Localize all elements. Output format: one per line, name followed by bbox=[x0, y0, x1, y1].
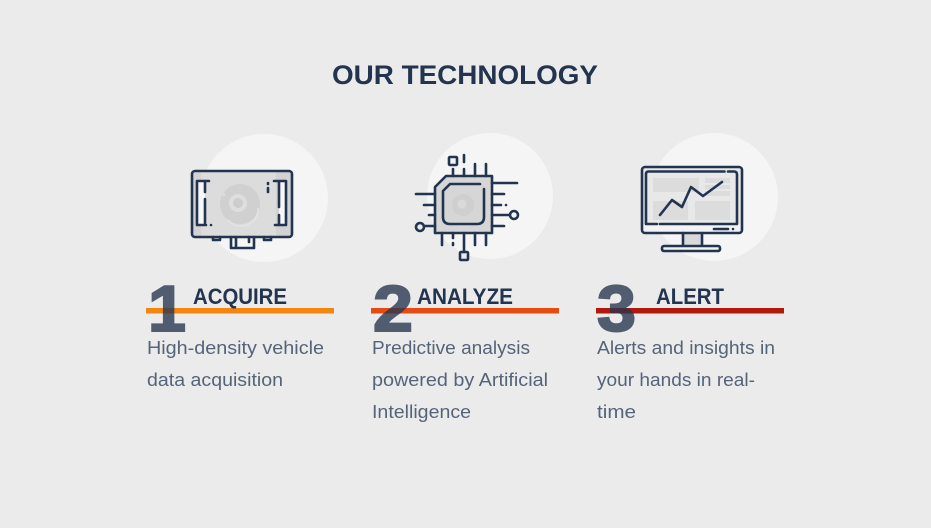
body text: acquire: data acquisition bbox=[147, 369, 283, 390]
heading: analyze: ANALYZE bbox=[417, 284, 513, 309]
panel: alert bbox=[596, 133, 784, 422]
heading: acquire: ACQUIRE bbox=[193, 284, 287, 309]
icon: monitor with chart bbox=[642, 133, 778, 261]
number 3: 3 bbox=[597, 272, 636, 345]
body text: alert: time bbox=[597, 401, 636, 422]
body text: acquire: High-density vehicle bbox=[147, 337, 324, 358]
number 1: 1 bbox=[148, 272, 186, 345]
bar: alert bbox=[596, 308, 784, 314]
panel: acquire bbox=[146, 134, 334, 390]
body text: analyze: Intelligence bbox=[372, 401, 471, 422]
body text: alert: your hands in real- bbox=[597, 369, 755, 390]
body text: alert bbox=[597, 337, 775, 422]
body text: analyze: Predictive analysis bbox=[372, 337, 530, 358]
body text: acquire bbox=[147, 337, 324, 390]
body text: alert: Alerts and insights in bbox=[597, 337, 775, 358]
panel: analyze bbox=[371, 133, 559, 422]
body text: analyze: powered by Artificial bbox=[372, 369, 548, 390]
icon: data acquisition device bbox=[192, 134, 328, 262]
bar: analyze bbox=[371, 308, 559, 314]
title: OUR TECHNOLOGY bbox=[332, 60, 598, 90]
icon: processor chip bbox=[416, 133, 553, 260]
bar: acquire bbox=[146, 308, 334, 314]
number 2: 2 bbox=[373, 272, 413, 345]
heading: alert: ALERT bbox=[656, 284, 725, 309]
body text: analyze bbox=[372, 337, 548, 422]
